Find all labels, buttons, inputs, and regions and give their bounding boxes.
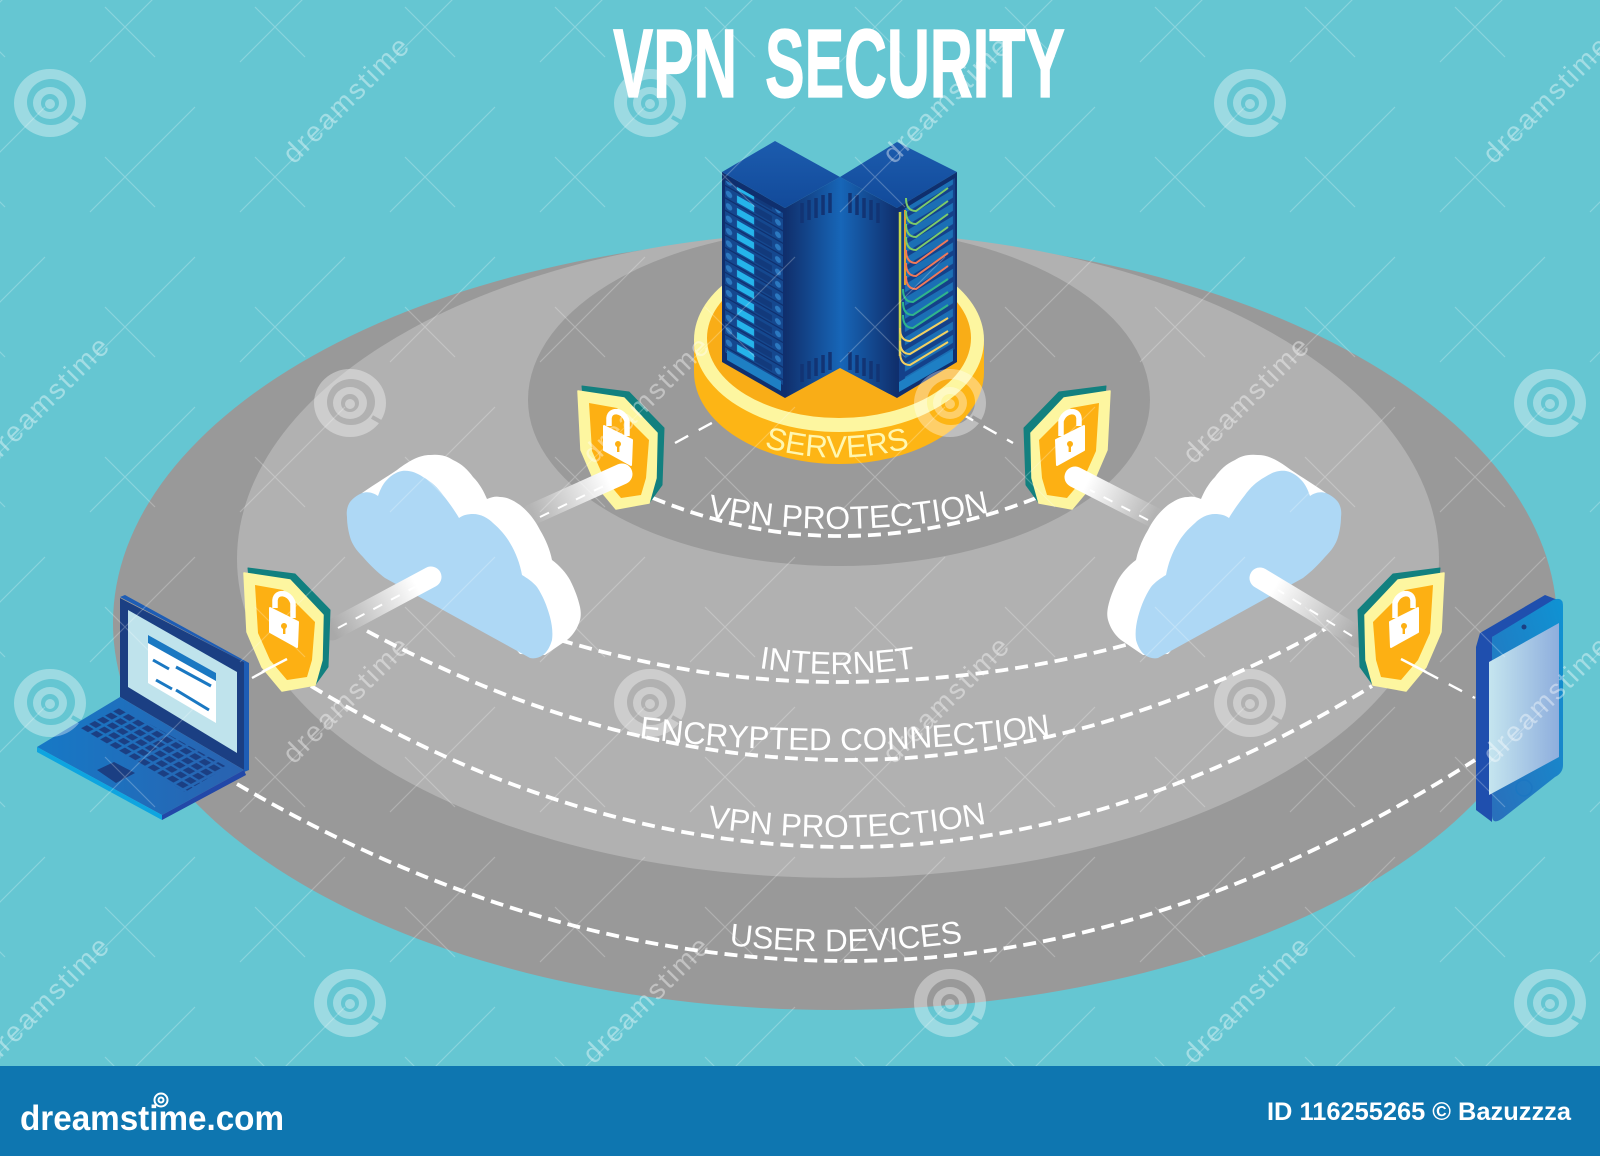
- footer logo spiral: [154, 1094, 168, 1106]
- laptop lid: [120, 595, 249, 772]
- title: SECURITY: [765, 9, 1065, 118]
- laptop base: [37, 697, 246, 820]
- dashed ring: user devices: [237, 760, 1475, 961]
- title: VPN: [613, 9, 737, 118]
- rack cables: [900, 188, 948, 365]
- tube: upper right: [1075, 477, 1153, 520]
- rack middle face: [785, 177, 897, 398]
- watermark text: dreamstime: [1176, 931, 1315, 1069]
- rack top faces: [722, 141, 957, 208]
- shield: upper left: [578, 386, 664, 509]
- dashed ring: VPN protection inner: [653, 498, 1036, 536]
- platform: inner disc, VPN protection layer: [528, 228, 1150, 566]
- tube: lower left: [332, 577, 431, 630]
- watermark text: dreamstime: [576, 931, 715, 1069]
- title: [613, 9, 1065, 118]
- rack right face: [897, 172, 957, 398]
- footer logo text: dreamstime.com: [20, 1099, 284, 1138]
- cloud: right: [1107, 455, 1341, 658]
- laptop screen window: [148, 635, 216, 723]
- shield dash: lower right: [1401, 659, 1426, 672]
- rack left face: [722, 172, 785, 398]
- label: encrypted connection: ENCRYPTED CONNECTION: [642, 714, 1048, 750]
- connector dashes between shields, servers and devices: [252, 413, 1475, 698]
- platform: outer disc, user devices layer: [113, 236, 1557, 1010]
- shield: upper right: [1024, 386, 1110, 509]
- watermark text: dreamstime: [1176, 331, 1315, 469]
- dashed ring: internet: [560, 640, 1133, 682]
- tube: lower right: [1260, 578, 1358, 637]
- shield dash: lower left: [262, 659, 287, 672]
- label: internet: INTERNET: [762, 646, 912, 674]
- label: user devices: USER DEVICES: [732, 922, 961, 952]
- tube: upper left: [533, 474, 622, 517]
- label: VPN protection inner: VPN PROTECTION: [711, 491, 987, 530]
- cloud: left: [347, 455, 581, 658]
- watermark text: dreamstime: [876, 631, 1015, 769]
- watermark text: dreamstime: [576, 331, 715, 469]
- footer band: [0, 1066, 1600, 1156]
- label: VPN protection outer: VPN PROTECTION: [710, 802, 984, 838]
- dashed ring: VPN protection outer: [311, 686, 1372, 847]
- footer image id and credit: ID 116255265 © Bazuzzza: [1267, 1098, 1572, 1126]
- shield: lower right: [1358, 568, 1444, 691]
- watermark text: dreamstime: [276, 631, 415, 769]
- shield: lower left: [244, 568, 330, 691]
- platform: middle disc, VPN and internet layer: [237, 232, 1439, 878]
- server racks: [722, 141, 957, 398]
- watermark text: dreamstime: [876, 31, 1015, 169]
- smartphone: [1476, 595, 1563, 822]
- watermark text: dreamstime: [276, 31, 415, 169]
- dashed ring: encrypted connection: [367, 628, 1327, 760]
- laptop: [37, 595, 249, 820]
- label: servers: SERVERS: [766, 428, 908, 458]
- server base: [694, 286, 984, 464]
